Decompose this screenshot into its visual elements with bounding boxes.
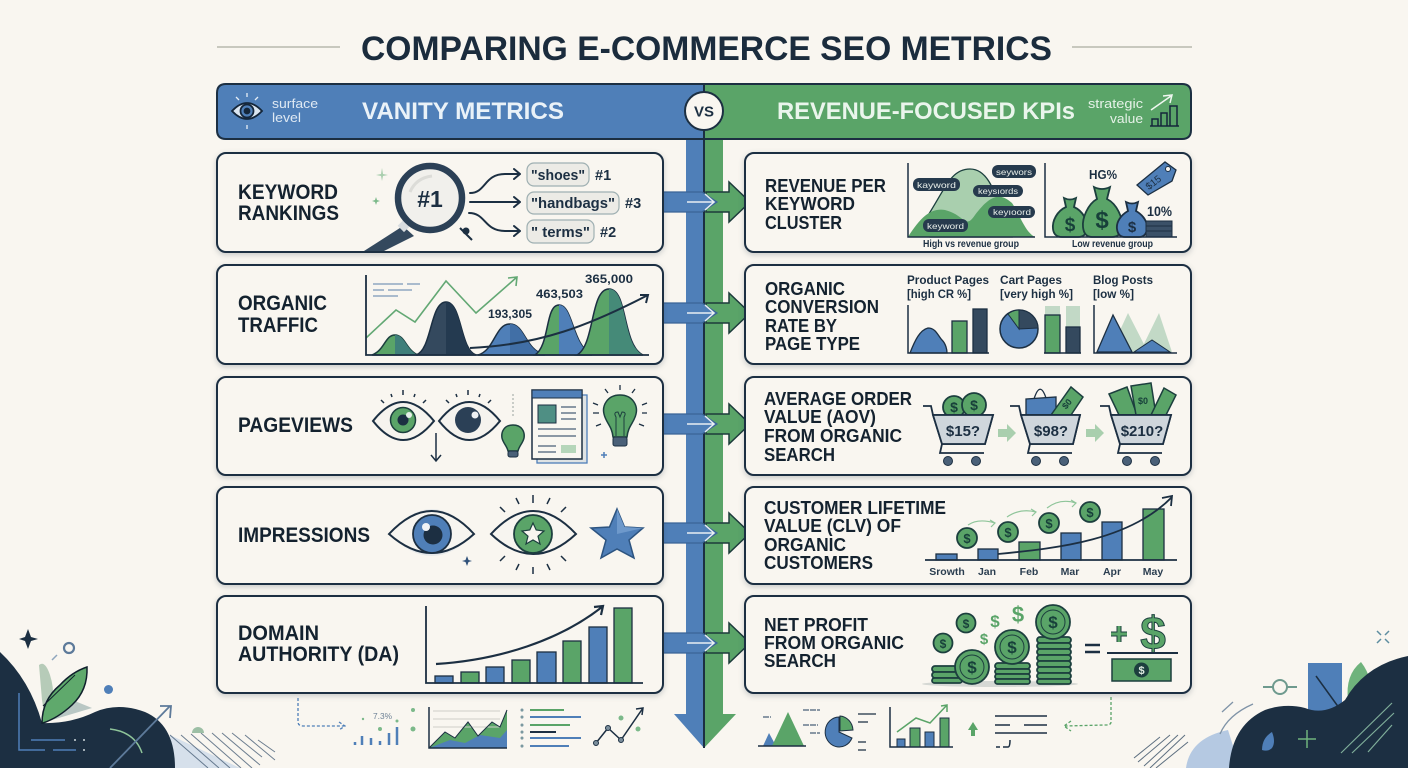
- label: domain authority: AUTHORITY (DA): [238, 643, 399, 666]
- icon: coin stacks: $: [967, 658, 977, 677]
- chart: cart pages: [very high %]: [1000, 287, 1073, 301]
- chart: keyword mountain: keyword: [927, 221, 964, 231]
- chart: traffic bell curves: 463,503: [536, 287, 583, 301]
- chart: blog posts: Blog Posts: [1093, 273, 1153, 287]
- keyword pills: "handbags": [531, 196, 615, 212]
- icon: cart $98: [1010, 387, 1083, 466]
- icon: cart $210: $210?: [1121, 423, 1163, 440]
- chart: money bags: 10%: [1147, 204, 1172, 219]
- chart: product pages: Product Pages: [907, 273, 989, 287]
- decoration: bottom-right corner: [1134, 631, 1408, 768]
- title rule left: [217, 46, 340, 48]
- label: net profit: SEARCH: [764, 650, 836, 671]
- label: strategic value: value: [1110, 111, 1143, 126]
- header: vanity side: [217, 84, 704, 139]
- icon: big bulb: [593, 385, 647, 458]
- label: organic traffic: [238, 292, 327, 337]
- label: organic traffic: ORGANIC: [238, 292, 327, 315]
- icon: coin stacks: $: [980, 631, 989, 648]
- chart: traffic bell curves: 365,000: [585, 272, 633, 286]
- chart: lifetime value bars: $: [1004, 525, 1012, 540]
- chart: lifetime value bars: $: [1045, 516, 1053, 531]
- header: revenue side: [704, 84, 1191, 139]
- chart: lifetime value bars: Mar: [1061, 566, 1079, 578]
- icon: cart $210: [1100, 383, 1176, 466]
- bag centre: $: [1095, 207, 1109, 234]
- chart: cart pages: [1000, 273, 1081, 353]
- arrow: cart two to three: [1086, 424, 1104, 442]
- arrow: cart one to two: [998, 424, 1016, 442]
- keyword pills: [527, 163, 641, 243]
- label: strategic value: [1088, 96, 1144, 126]
- chart: keyword mountain: keyıoord: [993, 207, 1031, 217]
- chart: lifetime value bars: Jan: [978, 566, 996, 578]
- label: keyword rankings: RANKINGS: [238, 202, 339, 225]
- label: keyword rankings: KEYWORD: [238, 181, 338, 204]
- icon: web page: [532, 390, 587, 463]
- label: keyword rankings: [238, 181, 339, 225]
- dashed arrow right: [1064, 697, 1111, 731]
- icon: cart $15: [923, 393, 993, 466]
- label: customer lifetime value: [764, 497, 946, 573]
- label: pageviews: PAGEVIEWS: [238, 414, 353, 437]
- chart: blog posts: [1093, 273, 1177, 353]
- header banner: [217, 84, 1191, 139]
- panel: pageviews: [217, 377, 663, 475]
- icon: coin stacks: $: [990, 612, 1000, 631]
- label: net profit: NET PROFIT: [764, 614, 869, 635]
- chart: product pages: [907, 273, 989, 353]
- label: organic conversion rate: [765, 278, 879, 354]
- chart: lifetime value bars: $: [1086, 505, 1094, 520]
- label: customer lifetime value: CUSTOMERS: [764, 552, 873, 573]
- icon: coin stacks: $: [1012, 602, 1024, 627]
- label: domain authority: DOMAIN: [238, 622, 319, 645]
- panel: average order value: [745, 377, 1191, 475]
- icon: eye surface level: [232, 93, 262, 129]
- connector row 2: [663, 293, 750, 333]
- title: COMPARING E-COMMERCE SEO METRICS: [361, 30, 1052, 68]
- icon: coin stacks: $: [1007, 638, 1017, 657]
- icon: coin stacks: $: [963, 617, 970, 631]
- mini pie chart: [825, 714, 876, 750]
- label: organic conversion rate: ORGANIC: [765, 278, 845, 299]
- panel: organic conversion rate by page type: [745, 265, 1191, 364]
- chart: money bags: HG%: [1089, 167, 1117, 182]
- central comparison arrow: [674, 135, 736, 748]
- label: revenue per keyword cluster: CLUSTER: [765, 212, 842, 233]
- chart: lifetime value bars: May: [1143, 566, 1163, 578]
- label: average order value: [764, 388, 912, 465]
- mini list lines: [522, 710, 581, 746]
- label: strategic value: strategic: [1088, 96, 1144, 111]
- heading: revenue-focused KPIs: REVENUE-FOCUSED KPIs: [777, 98, 1075, 125]
- label: organic conversion rate: PAGE TYPE: [765, 333, 860, 354]
- chart: keyword mountain: kayword: [917, 180, 956, 190]
- label: customer lifetime value: VALUE (CLV) OF: [764, 515, 901, 536]
- chart: lifetime value bars: Apr: [1103, 566, 1121, 578]
- chart: money bags: [1045, 162, 1177, 250]
- label: organic conversion rate: CONVERSION: [765, 296, 879, 317]
- mini bars with percent: [355, 708, 416, 745]
- icon: cart $98: $98?: [1034, 423, 1068, 440]
- icon: star: [591, 509, 643, 558]
- chart: money bags: $15: [1144, 173, 1164, 193]
- icon: magnifier: #1: [417, 186, 443, 212]
- VS badge: VS: [694, 104, 714, 120]
- connector row 1: [663, 182, 750, 222]
- icon: coin stacks: [922, 602, 1078, 687]
- icon: magnifier: [364, 166, 472, 251]
- icon: cart $15: $: [970, 397, 978, 413]
- label: domain authority: [238, 622, 399, 666]
- keyword pills: #3: [625, 196, 641, 212]
- icon: coin stacks: $: [940, 637, 947, 651]
- label: organic traffic: TRAFFIC: [238, 314, 318, 337]
- mini charts: bottom left: [298, 698, 643, 748]
- mini charts: bottom right: [758, 697, 1111, 750]
- chart: keyword mountain: [908, 163, 1036, 250]
- bag right: $: [1128, 219, 1137, 236]
- panel: keyword rankings: [217, 153, 663, 252]
- heading: vanity metrics: VANITY METRICS: [362, 98, 564, 125]
- label: surface level: [272, 96, 318, 125]
- label: organic conversion rate: RATE BY: [765, 315, 838, 336]
- mini bar chart: [890, 705, 953, 747]
- icon: growth bars: [1150, 95, 1179, 126]
- label: surface level: level: [272, 110, 301, 125]
- chart: lifetime value bars: $: [963, 531, 971, 546]
- mini text lines: [968, 716, 1047, 747]
- icon: coin stacks: $: [1048, 613, 1058, 632]
- panel: net profit: [745, 596, 1191, 693]
- keyword pills: " terms": [531, 225, 590, 241]
- keyword pills: #2: [600, 225, 616, 241]
- panel: customer lifetime value: [745, 487, 1191, 584]
- chart: blog posts: [low %]: [1093, 287, 1134, 301]
- chart: keyword mountain: High vs revenue group: [923, 239, 1019, 250]
- panel: organic traffic: [217, 265, 663, 364]
- mini line chart: [594, 708, 643, 746]
- label: net profit: FROM ORGANIC: [764, 632, 904, 653]
- label: average order value: FROM ORGANIC: [764, 425, 902, 446]
- chart: domain authority bars: [426, 606, 643, 683]
- decoration: bottom-left corner: [0, 629, 275, 768]
- icon: profit equation: $: [1140, 607, 1166, 659]
- icon: two eyes: [373, 390, 500, 461]
- chart: lifetime value bars: Srowth: [929, 566, 965, 578]
- connector row 3: [663, 404, 750, 444]
- connector row 4: [663, 513, 750, 553]
- title rule right: [1072, 46, 1192, 48]
- icon: star eye: [491, 495, 576, 574]
- chart: traffic bell curves: 193,305: [488, 307, 532, 321]
- icon: cart $98: $0: [1060, 397, 1074, 411]
- chart: traffic bell curves: [366, 272, 649, 355]
- chart: keyword mountain: keysıords: [978, 186, 1018, 196]
- keyword arrows: [469, 169, 520, 236]
- panel: domain authority: [217, 596, 663, 693]
- panel: impressions: [217, 487, 663, 584]
- chart: keyword mountain: seywors: [996, 167, 1032, 177]
- label: customer lifetime value: CUSTOMER LIFETIME: [764, 497, 946, 518]
- mini area chart: [429, 707, 507, 748]
- label: surface level: surface: [272, 96, 318, 111]
- icon: small bulb: [502, 394, 524, 457]
- chart: lifetime value bars: Feb: [1020, 566, 1038, 578]
- icon: cart $15: $: [950, 399, 958, 415]
- label: net profit: [764, 614, 904, 671]
- keyword pills: #1: [595, 168, 611, 184]
- chart: product pages: [high CR %]: [907, 287, 971, 301]
- label: average order value: VALUE (AOV): [764, 406, 876, 427]
- label: average order value: AVERAGE ORDER: [764, 388, 912, 409]
- chart: lifetime value bars: [925, 496, 1177, 578]
- label: average order value: SEARCH: [764, 444, 835, 465]
- VS badge: [685, 92, 723, 130]
- mini peak chart: [758, 710, 820, 746]
- label: revenue per keyword cluster: KEYWORD: [765, 193, 855, 214]
- label: customer lifetime value: ORGANIC: [764, 534, 846, 555]
- connector row 5: [663, 623, 750, 663]
- icon: cart $15: $15?: [946, 423, 980, 440]
- keyword pills: "shoes": [531, 168, 585, 184]
- icon: profit equation: [1085, 607, 1178, 681]
- chart: cart pages: Cart Pages: [1000, 273, 1062, 287]
- label: impressions: IMPRESSIONS: [238, 524, 370, 547]
- bag left: $: [1065, 215, 1076, 236]
- label: revenue per keyword cluster: [765, 175, 886, 233]
- mini bars with percent: 7.3%: [373, 712, 392, 721]
- icon: profit equation: $: [1138, 665, 1145, 677]
- icon: blue eye: [389, 509, 474, 566]
- panel: revenue per keyword cluster: [745, 153, 1191, 252]
- label: revenue per keyword cluster: REVENUE PER: [765, 175, 886, 196]
- dashed arrow left: [298, 698, 345, 730]
- chart: money bags: Low revenue group: [1072, 239, 1153, 250]
- icon: cart $210: $0: [1138, 396, 1148, 406]
